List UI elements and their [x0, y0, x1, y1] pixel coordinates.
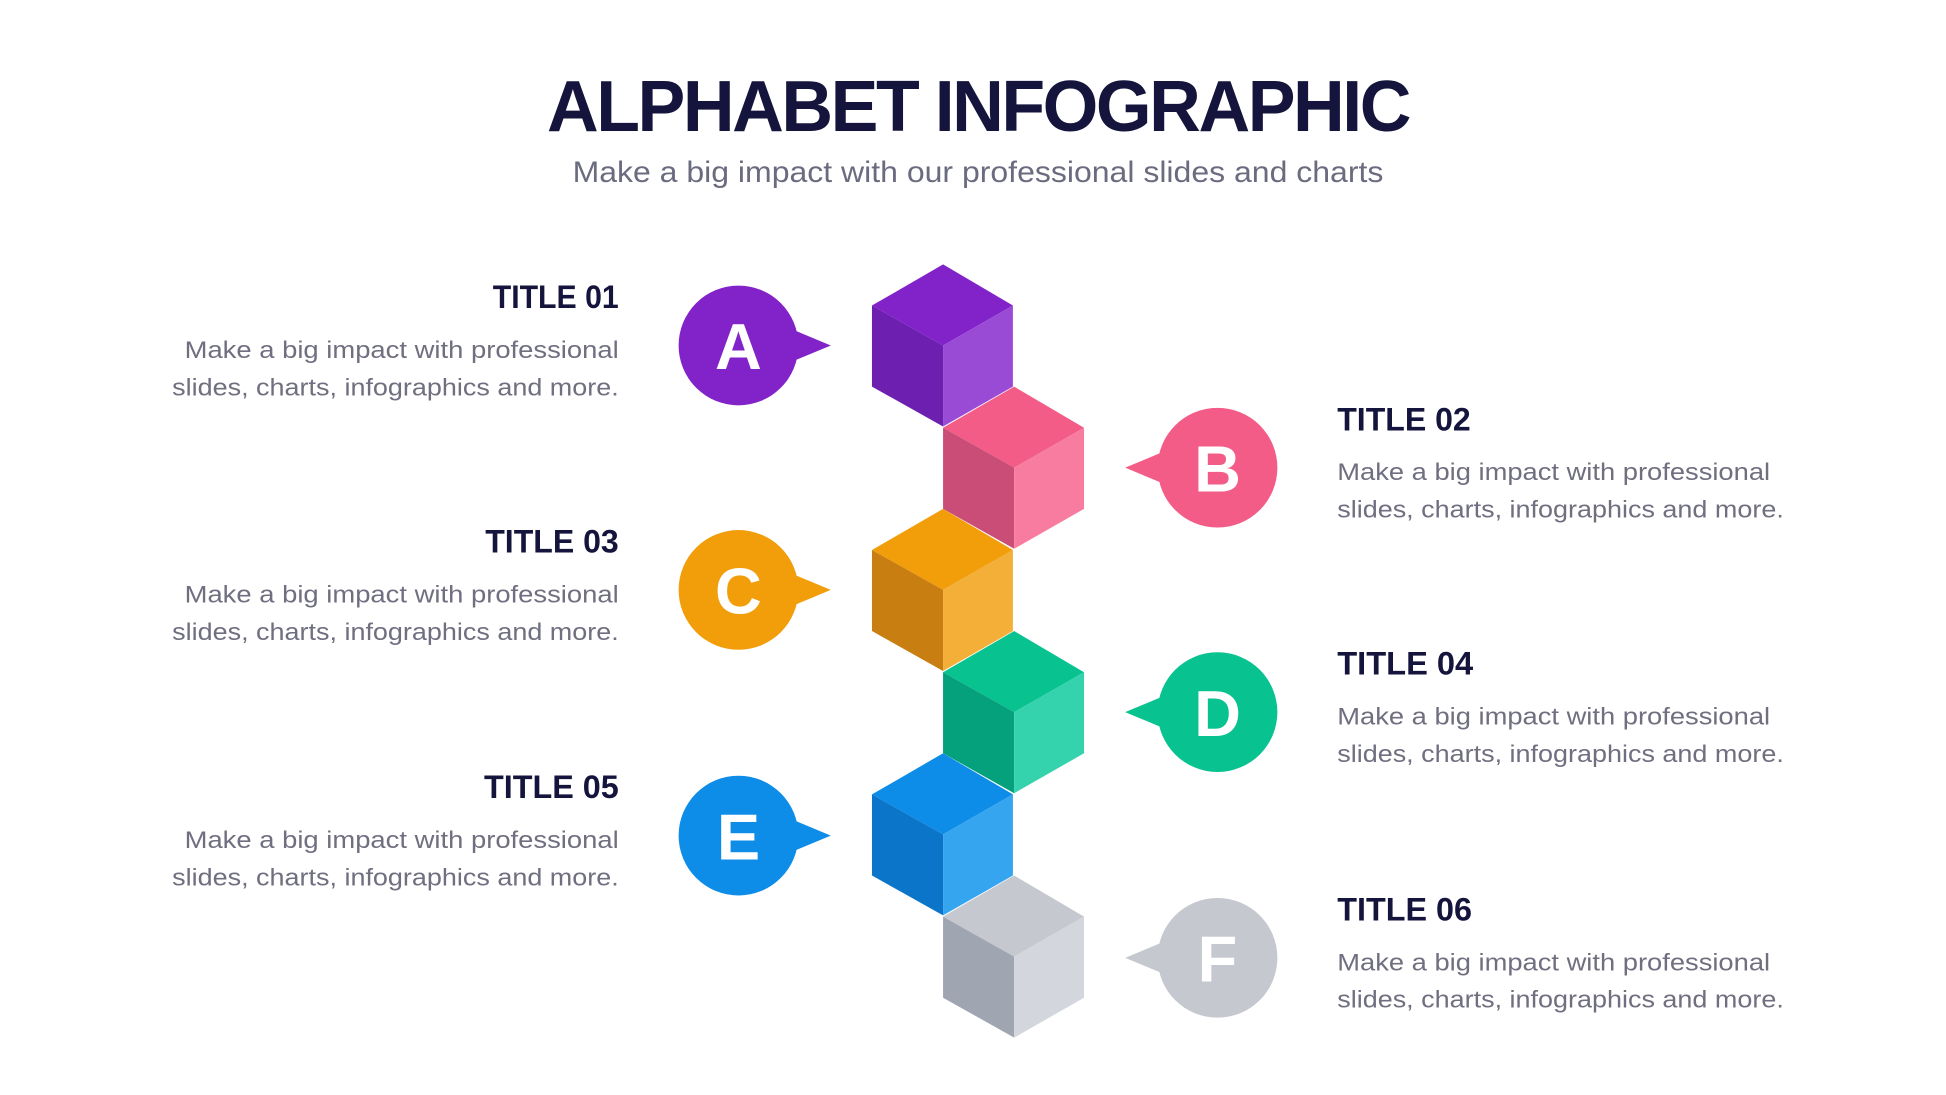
text block 04: Make a big impact with professional	[1337, 704, 1770, 731]
title: ALPHABET INFOGRAPHIC	[547, 67, 1410, 147]
text block 04: slides, charts, infographics and more.	[1337, 741, 1784, 768]
text block 05	[172, 769, 619, 891]
badge F: F	[1198, 923, 1237, 996]
text block 06: TITLE 06	[1337, 891, 1472, 927]
text block 03: slides, charts, infographics and more.	[172, 619, 619, 646]
badge F	[1125, 898, 1277, 1018]
cube D	[943, 631, 1084, 793]
cube A	[872, 264, 1013, 427]
text block 02: slides, charts, infographics and more.	[1337, 497, 1784, 524]
badge D: D	[1194, 677, 1241, 750]
badge B: B	[1194, 432, 1241, 505]
cube E	[872, 753, 1013, 915]
text block 06	[1337, 891, 1784, 1014]
text block 05: TITLE 05	[484, 769, 619, 805]
badge C: C	[715, 555, 762, 628]
text block 05: slides, charts, infographics and more.	[172, 864, 619, 891]
badge D	[1125, 652, 1277, 772]
text block 04	[1337, 646, 1784, 768]
badge E	[679, 776, 831, 895]
text block 02	[1337, 401, 1784, 524]
text block 02: Make a big impact with professional	[1337, 459, 1770, 486]
text block 03	[172, 523, 619, 646]
badge A: A	[715, 310, 762, 383]
text block 03: TITLE 03	[485, 523, 619, 559]
badge E: E	[717, 800, 760, 873]
text block 01	[172, 279, 619, 401]
cube C	[872, 509, 1013, 671]
badge B	[1125, 408, 1277, 528]
subtitle: Make a big impact with our professional slides and charts	[573, 156, 1383, 189]
text block 03: Make a big impact with professional	[185, 581, 619, 608]
text block 01: Make a big impact with professional	[185, 337, 619, 364]
text block 06: Make a big impact with professional	[1337, 949, 1770, 976]
badge C	[679, 530, 831, 650]
cube F	[943, 876, 1084, 1038]
text block 02: TITLE 02	[1337, 401, 1471, 437]
cube stack	[872, 264, 1084, 1038]
text block 01: slides, charts, infographics and more.	[172, 374, 619, 401]
text block 04: TITLE 04	[1337, 646, 1473, 682]
text block 06: slides, charts, infographics and more.	[1337, 987, 1784, 1014]
text block 05: Make a big impact with professional	[185, 827, 619, 854]
badge A	[679, 286, 831, 405]
text block 01: TITLE 01	[493, 279, 619, 315]
cube B	[943, 387, 1084, 549]
